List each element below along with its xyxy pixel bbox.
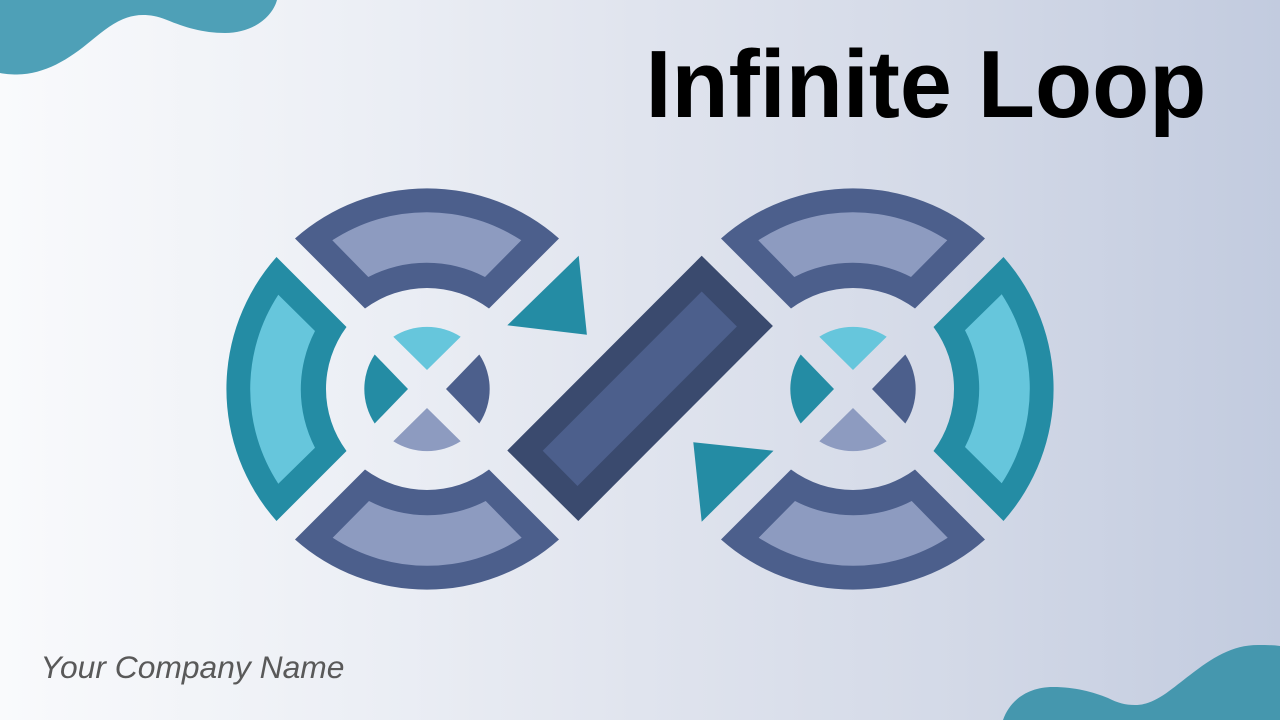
band: left circle top segment <box>295 188 559 308</box>
hub wedge: top <box>819 327 887 370</box>
infinity loop graphic <box>226 188 1054 590</box>
arrow: lower triangle <box>693 442 774 522</box>
band: right circle bottom segment <box>721 470 985 590</box>
arrow: upper triangle <box>507 256 587 335</box>
hub wedge: right <box>446 354 490 424</box>
hub wedge: left <box>364 354 408 424</box>
decorative blob: bottom right <box>1003 645 1280 720</box>
band: left circle left segment <box>226 257 346 521</box>
right circle <box>721 188 1054 590</box>
band: right circle right segment <box>934 257 1054 521</box>
decorative blob: top left <box>0 0 277 74</box>
hub wedge: bottom <box>819 408 887 451</box>
hub wedge: top <box>393 327 461 370</box>
band: left circle bottom segment <box>295 470 559 590</box>
hub wedge: bottom <box>393 408 461 451</box>
band: right circle top segment <box>721 188 985 308</box>
title: Infinite Loop <box>646 30 1206 137</box>
left circle <box>226 188 559 590</box>
hub wedge: left <box>790 354 834 424</box>
hub wedge: right <box>872 354 916 424</box>
diagonal connector bar <box>507 256 773 521</box>
company name: Your Company Name <box>40 649 344 685</box>
